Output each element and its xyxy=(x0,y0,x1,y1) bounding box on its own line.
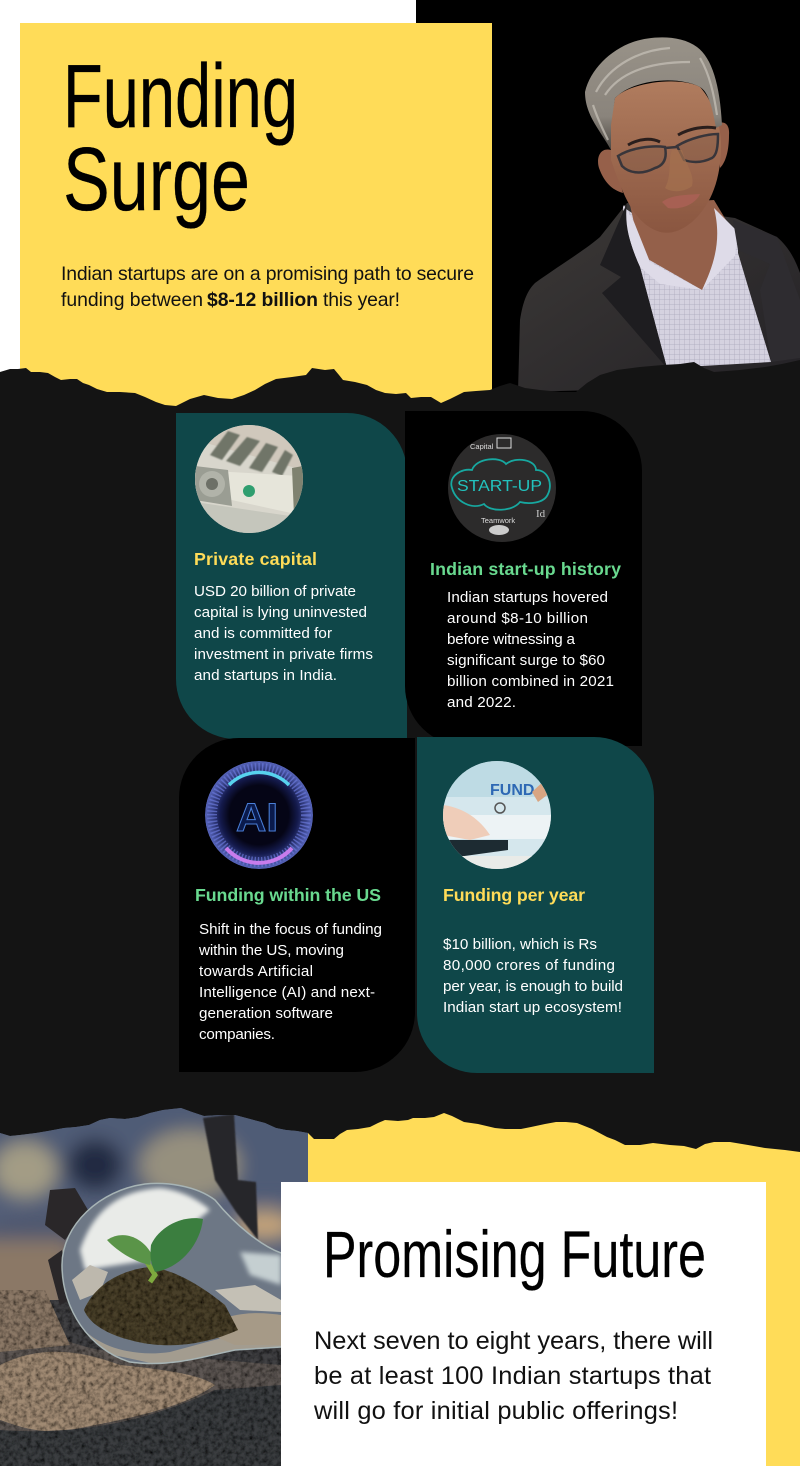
heading: Funding within the US xyxy=(195,885,381,905)
icon: fund calculator xyxy=(443,761,551,869)
body text xyxy=(198,921,382,1043)
intro text: funding between xyxy=(61,289,203,311)
closing text xyxy=(313,1327,713,1425)
shirt collar right xyxy=(702,208,738,290)
heading: Private capital xyxy=(194,549,317,569)
body text xyxy=(443,936,623,1016)
body text: significant surge to $60 xyxy=(447,652,605,669)
bottom yellow torn panel xyxy=(308,1113,800,1466)
card: Indian start-up history xyxy=(405,411,642,746)
body text: Indian startups hovered xyxy=(447,589,608,606)
icon: start-up chalkboard: START-UP xyxy=(457,478,542,495)
header yellow panel xyxy=(20,23,492,413)
jacket xyxy=(518,203,800,392)
photo: man in glasses and dark blazer xyxy=(518,37,800,392)
seedling leaves xyxy=(107,1218,203,1282)
body text: per year, is enough to build xyxy=(443,978,623,995)
shirt xyxy=(623,207,771,368)
card: Private capital xyxy=(176,413,407,739)
body text: Shift in the focus of funding xyxy=(199,921,382,938)
shirt collar left xyxy=(623,205,702,290)
title: Funding Surge: Surge xyxy=(63,130,250,230)
lapels xyxy=(600,203,667,368)
body text: USD 20 billion of private xyxy=(194,583,356,600)
dry stem xyxy=(203,1114,258,1240)
intro text xyxy=(61,263,474,311)
icon: start-up chalkboard: Teamwork xyxy=(481,516,515,525)
photo: seedling in a light bulb xyxy=(0,1100,330,1466)
hair streaks xyxy=(593,48,717,140)
face xyxy=(611,81,721,233)
card: Funding within the US xyxy=(179,738,415,1072)
icon: fund calculator: FUND xyxy=(490,782,534,799)
blurred background xyxy=(0,1108,308,1300)
body text: billion combined in 2021 xyxy=(447,673,614,690)
body text: and 2022. xyxy=(447,694,516,711)
body text: around $8-10 billion xyxy=(447,610,588,627)
body text: before witnessing a xyxy=(447,631,576,648)
closing text: be at least 100 Indian startups that xyxy=(314,1362,711,1390)
bottom white panel xyxy=(281,1182,766,1466)
body text: within the US, moving xyxy=(198,942,344,959)
icon: AI ring xyxy=(205,761,313,869)
closing text: Next seven to eight years, there will xyxy=(314,1327,713,1355)
body text: Indian start up ecosystem! xyxy=(443,999,622,1016)
heading: Indian start-up history xyxy=(430,559,621,579)
icon: start-up chalkboard: Id xyxy=(536,508,546,520)
icon: dollar bills xyxy=(195,425,303,533)
hair xyxy=(585,37,722,150)
dry leaves behind the bulb xyxy=(45,1188,88,1305)
mouth and nose xyxy=(662,194,700,208)
body text: towards Artificial xyxy=(199,963,313,980)
light bulb glass xyxy=(62,1183,281,1365)
body text: and startups in India. xyxy=(194,667,337,684)
brows xyxy=(628,127,716,145)
body text xyxy=(194,583,373,684)
body text xyxy=(447,589,614,711)
icon: start-up chalkboard: Capital xyxy=(470,442,494,451)
closing text: will go for initial public offerings! xyxy=(313,1397,678,1425)
body text: investment in private firms xyxy=(194,646,373,663)
intro text: this year! xyxy=(323,289,400,311)
glasses xyxy=(618,134,718,172)
soil mound xyxy=(84,1267,238,1345)
neck xyxy=(630,200,735,290)
body text: $10 billion, which is Rs xyxy=(443,936,597,953)
title: Funding Surge: Funding xyxy=(63,47,298,147)
body text: companies. xyxy=(199,1026,275,1043)
card: Funding per year xyxy=(417,737,654,1073)
ears xyxy=(598,122,729,193)
header background: white and black blocks xyxy=(0,0,800,410)
icon: start-up chalkboard xyxy=(448,434,556,542)
body text: Intelligence (AI) and next- xyxy=(199,984,375,1001)
body text: generation software xyxy=(199,1005,333,1022)
rock ground xyxy=(0,1290,281,1466)
intro text: Indian startups are on a promising path to secure xyxy=(61,263,474,285)
icon: AI ring: AI xyxy=(236,796,278,840)
title: Funding Surge xyxy=(63,47,298,230)
torn paper edge: top xyxy=(0,360,800,420)
intro text: $8-12 billion xyxy=(207,289,318,311)
heading: Funding per year xyxy=(443,885,585,905)
body text: capital is lying uninvested xyxy=(194,604,367,621)
body text: 80,000 crores of funding xyxy=(443,957,615,974)
body text: and is committed for xyxy=(194,625,332,642)
